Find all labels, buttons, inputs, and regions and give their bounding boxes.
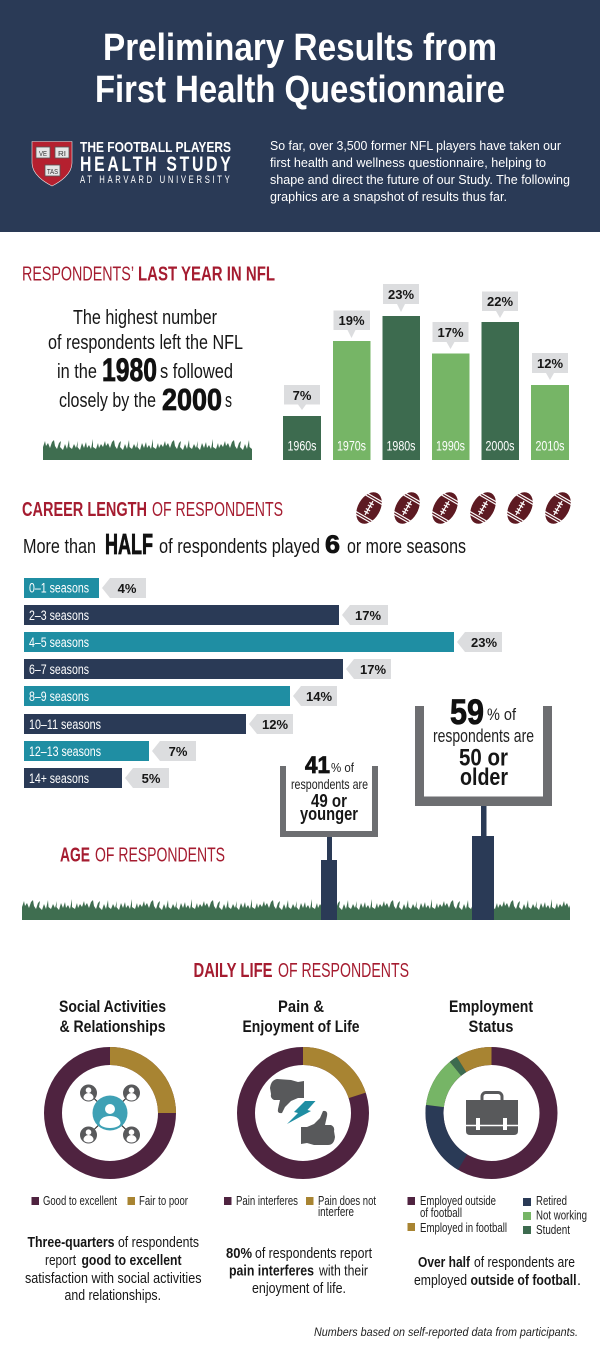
caption: 80% (226, 1246, 252, 1262)
bar 1960s (283, 385, 321, 460)
row 0-1 seasons: 4% (118, 581, 137, 596)
text: highest number: s (225, 390, 232, 412)
text: more than half: 6 (325, 531, 340, 559)
heading: career length (22, 499, 283, 521)
bar chart: career length (24, 578, 502, 788)
bar chart: last year in NFL (283, 284, 569, 460)
goalpost: 59 percent: % of (487, 705, 516, 724)
text: highest number: The highest number (73, 307, 217, 329)
legend: Pain interferes (236, 1194, 298, 1208)
row 4-5 seasons: 4–5 seasons (29, 635, 89, 650)
legend: Employed in football (420, 1221, 507, 1235)
row 8-9 seasons: 14% (306, 689, 332, 704)
heading: age of respondents: AGE (60, 844, 90, 866)
heading: career length: OF RESPONDENTS (152, 499, 283, 521)
text: highest number: closely by the (59, 390, 156, 412)
legend: of football (420, 1206, 462, 1220)
bar 1960s: 1960s (288, 438, 316, 454)
caption: satisfaction with social activities (25, 1271, 202, 1287)
legend: Fair to poor (139, 1194, 188, 1208)
donut chart (434, 1056, 548, 1170)
heading: age of respondents: OF RESPONDENTS (95, 844, 225, 866)
bar 1970s: 1970s (337, 438, 366, 454)
caption: employed (414, 1273, 467, 1289)
legend: Good to excellent (43, 1194, 117, 1208)
row 8-9 seasons (24, 686, 337, 706)
logo: Harvard shield: RI (58, 151, 66, 158)
caption: of respondents report (255, 1246, 372, 1262)
grass: age (22, 898, 570, 920)
logo wordmark: AT HARVARD UNIVERSITY (80, 174, 230, 186)
title: First Health Questionnaire (95, 69, 505, 111)
bar 2000s: 2000s (486, 438, 514, 454)
heading: last year in NFL: RESPONDENTS’ (22, 264, 134, 286)
goalpost: 59 percent: 50 or (459, 744, 508, 772)
caption: Over half (418, 1255, 470, 1271)
panel: employment (408, 998, 587, 1289)
row 12-13 seasons: 7% (169, 744, 188, 759)
caption (414, 1255, 581, 1289)
logo wordmark (80, 139, 231, 186)
row 10-11 seasons: 12% (262, 717, 288, 732)
panel heading (242, 998, 360, 1036)
panel heading: Social Activities (59, 998, 166, 1016)
caption: outside of football (470, 1273, 576, 1289)
goalpost: 59 percent: respondents are (433, 726, 534, 746)
goalpost: 59 percent: older (460, 764, 508, 791)
donut chart (246, 1056, 360, 1170)
goalpost: 41 percent: % of (331, 760, 354, 775)
bar 1980s: 23% (388, 287, 414, 302)
row 0-1 seasons: 0–1 seasons (29, 580, 89, 596)
goalpost: 41 percent: respondents are (291, 776, 368, 792)
title (95, 27, 505, 111)
panel heading: & Relationships (60, 1018, 166, 1036)
header band (0, 0, 600, 232)
bar 2010s (531, 353, 569, 460)
text: more than half: of respondents played (159, 536, 320, 558)
bar 2000s (482, 292, 519, 460)
icon: people network (80, 1084, 140, 1144)
text: more than half: More than (23, 536, 96, 558)
logo: Harvard shield: VE (39, 151, 47, 158)
bar 2010s: 2010s (536, 438, 564, 454)
text: highest number: 1980 (102, 352, 157, 388)
intro text: graphics are a snapshot of results thus far. (270, 189, 507, 204)
bar 1990s: 17% (437, 325, 464, 340)
row 12-13 seasons: 12–13 seasons (29, 744, 101, 759)
heading: last year in NFL: LAST YEAR IN NFL (138, 264, 275, 286)
caption: and relationships. (64, 1288, 161, 1304)
icon: thumbs and bolt (270, 1079, 335, 1145)
caption (25, 1235, 202, 1304)
row 6-7 seasons (24, 659, 391, 679)
goalpost: 59 percent (415, 693, 552, 920)
intro text: So far, over 3,500 former NFL players have taken our (270, 138, 562, 153)
legend: Employed outside (420, 1194, 496, 1208)
text: more than half (23, 529, 466, 561)
caption (226, 1246, 372, 1297)
legend (224, 1194, 376, 1219)
panel: social activities (25, 998, 202, 1304)
row 10-11 seasons (24, 714, 293, 734)
legend (32, 1194, 188, 1208)
bar 1990s (432, 322, 470, 460)
goalpost: 59 percent: 59 (450, 693, 484, 732)
bar 1980s: 1980s (386, 438, 416, 454)
heading: career length: CAREER LENGTH (22, 499, 147, 521)
text: more than half: HALF (105, 529, 153, 561)
goalpost: 41 percent: 41 (305, 752, 330, 779)
text: more than half: or more seasons (347, 536, 466, 558)
heading: daily life: DAILY LIFE (194, 960, 272, 982)
row 12-13 seasons (24, 741, 196, 761)
goalpost: 41 percent: 49 or (311, 791, 347, 811)
legend: Retired (536, 1194, 567, 1208)
row 14+ seasons (24, 768, 169, 788)
row 14+ seasons: 5% (142, 771, 161, 786)
caption: with their (318, 1264, 368, 1280)
legend (408, 1194, 587, 1237)
caption: of respondents are (474, 1255, 575, 1271)
panel heading: Employment (449, 998, 533, 1016)
bar 1970s (333, 310, 370, 460)
panel heading (59, 998, 166, 1036)
caption: report (45, 1253, 76, 1269)
row 4-5 seasons (24, 632, 502, 652)
bar 1970s: 19% (338, 313, 365, 328)
intro text: shape and direct the future of our Study. The following (270, 172, 570, 187)
row 14+ seasons: 14+ seasons (29, 771, 89, 786)
caption: good to excellent (82, 1253, 182, 1269)
legend: interfere (318, 1205, 354, 1219)
bar 2000s: 22% (487, 294, 513, 309)
legend: Pain does not (318, 1194, 376, 1208)
heading: daily life (194, 960, 409, 982)
text: highest number: of respondents left the NFL (48, 332, 243, 354)
heading: age of respondents (60, 844, 225, 866)
panel heading: Pain & (278, 998, 324, 1016)
logo: Harvard shield: TAS (47, 169, 58, 176)
goalpost: 41 percent (280, 752, 378, 920)
row 2-3 seasons (24, 605, 388, 625)
panel heading (449, 998, 533, 1036)
grass (43, 438, 252, 460)
panel heading: Status (468, 1018, 514, 1036)
caption: of respondents (118, 1235, 199, 1251)
row 2-3 seasons: 2–3 seasons (29, 608, 89, 623)
caption: . (577, 1273, 581, 1289)
icon: briefcase (466, 1092, 518, 1135)
text: highest number: in the (57, 361, 97, 383)
title: Preliminary Results from (103, 27, 497, 69)
heading: daily life: OF RESPONDENTS (278, 960, 409, 982)
text: highest number: 2000 (162, 382, 222, 417)
intro text: first health and wellness questionnaire, helping to (270, 155, 546, 170)
text: highest number: s followed (160, 361, 233, 383)
logo wordmark: THE FOOTBALL PLAYERS (80, 139, 231, 156)
intro text (270, 138, 570, 204)
bar 2010s: 12% (537, 356, 563, 371)
row 6-7 seasons: 6–7 seasons (29, 662, 89, 677)
legend: Student (536, 1223, 570, 1237)
icons: six footballs (351, 488, 576, 528)
row 8-9 seasons: 8–9 seasons (29, 689, 89, 704)
logo wordmark: HEALTH STUDY (80, 152, 231, 176)
row 0-1 seasons (24, 578, 146, 598)
heading: last year in NFL (22, 264, 275, 286)
donut chart (53, 1056, 167, 1170)
bar 1990s: 1990s (436, 438, 465, 454)
row 10-11 seasons: 10–11 seasons (29, 717, 101, 732)
goalpost: 41 percent: younger (300, 804, 358, 824)
panel heading: Enjoyment of Life (242, 1018, 360, 1036)
row 4-5 seasons: 23% (471, 635, 497, 650)
logo: Harvard shield (32, 142, 72, 186)
row 2-3 seasons: 17% (355, 608, 381, 623)
panel: pain (224, 998, 376, 1297)
bar 1960s: 7% (293, 388, 312, 403)
footnote: Numbers based on self-reported data from participants. (314, 1327, 578, 1339)
caption: pain interferes (229, 1264, 314, 1280)
bar 1980s (382, 284, 420, 460)
row 6-7 seasons: 17% (360, 662, 386, 677)
caption: Three-quarters (28, 1235, 114, 1251)
text: highest number (48, 307, 243, 417)
caption: enjoyment of life. (252, 1281, 346, 1297)
